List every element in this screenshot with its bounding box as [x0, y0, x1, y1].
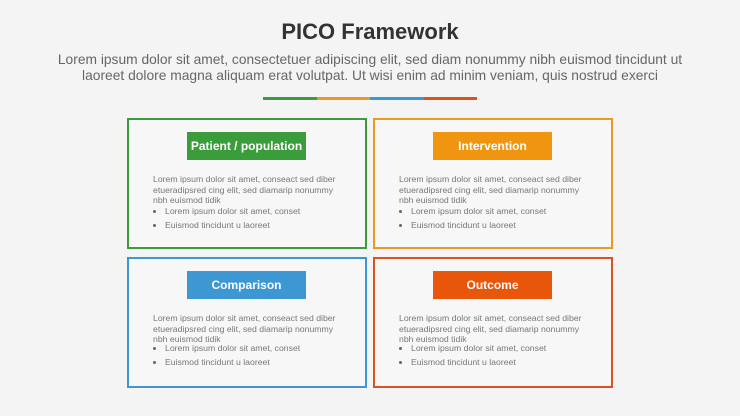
- label: patient: [187, 132, 306, 160]
- title: PICO Framework: [281, 19, 459, 44]
- color divider: [263, 97, 477, 100]
- text: [399, 313, 582, 344]
- panel: outcome: [373, 257, 613, 388]
- text: Lorem ipsum dolor sit amet, conseact sed diber: [153, 174, 336, 184]
- text: etueradipsred cing elit, sed diamarip nonummy: [153, 324, 333, 334]
- label: patient: Patient / population: [191, 139, 302, 153]
- text: etueradipsred cing elit, sed diamarip nonummy: [399, 184, 579, 194]
- text: Lorem ipsum dolor sit amet, conseact sed diber: [153, 313, 336, 323]
- label: intervention: Intervention: [458, 139, 527, 153]
- bullet 2: Euismod tincidunt u laoreet: [165, 220, 270, 230]
- label: comparison: Comparison: [211, 278, 282, 292]
- text: [399, 174, 582, 205]
- bullet 2: Euismod tincidunt u laoreet: [411, 220, 516, 230]
- label: outcome: Outcome: [466, 278, 518, 292]
- text: [153, 174, 336, 205]
- text: [153, 313, 336, 344]
- subtitle: laoreet dolore magna aliquam erat volutpat. Ut wisi enim ad minim veniam, quis nostrud exerci: [82, 68, 658, 82]
- text: Lorem ipsum dolor sit amet, conseact sed diber: [399, 313, 582, 323]
- bullet 1: Lorem ipsum dolor sit amet, conset: [165, 206, 300, 216]
- text: nbh euismod tidik: [153, 195, 221, 205]
- text: nbh euismod tidik: [153, 334, 221, 344]
- bullet 1: Lorem ipsum dolor sit amet, conset: [411, 343, 546, 353]
- subtitle: [58, 52, 682, 83]
- label: outcome: [433, 271, 552, 299]
- label: comparison: [187, 271, 306, 299]
- text: etueradipsred cing elit, sed diamarip nonummy: [399, 324, 579, 334]
- text: nbh euismod tidik: [399, 195, 467, 205]
- text: etueradipsred cing elit, sed diamarip nonummy: [153, 184, 333, 194]
- bullet 1: Lorem ipsum dolor sit amet, conset: [411, 206, 546, 216]
- panel: patient: [127, 118, 367, 249]
- bullet 1: Lorem ipsum dolor sit amet, conset: [165, 343, 300, 353]
- panel: intervention: [373, 118, 613, 249]
- subtitle: Lorem ipsum dolor sit amet, consectetuer adipiscing elit, sed diam nonummy nibh euismod tincidunt ut: [58, 52, 682, 67]
- label: intervention: [433, 132, 552, 160]
- bullet 2: Euismod tincidunt u laoreet: [411, 357, 516, 367]
- text: Lorem ipsum dolor sit amet, conseact sed diber: [399, 174, 582, 184]
- text: nbh euismod tidik: [399, 334, 467, 344]
- panel: comparison: [127, 257, 367, 388]
- bullet 2: Euismod tincidunt u laoreet: [165, 357, 270, 367]
